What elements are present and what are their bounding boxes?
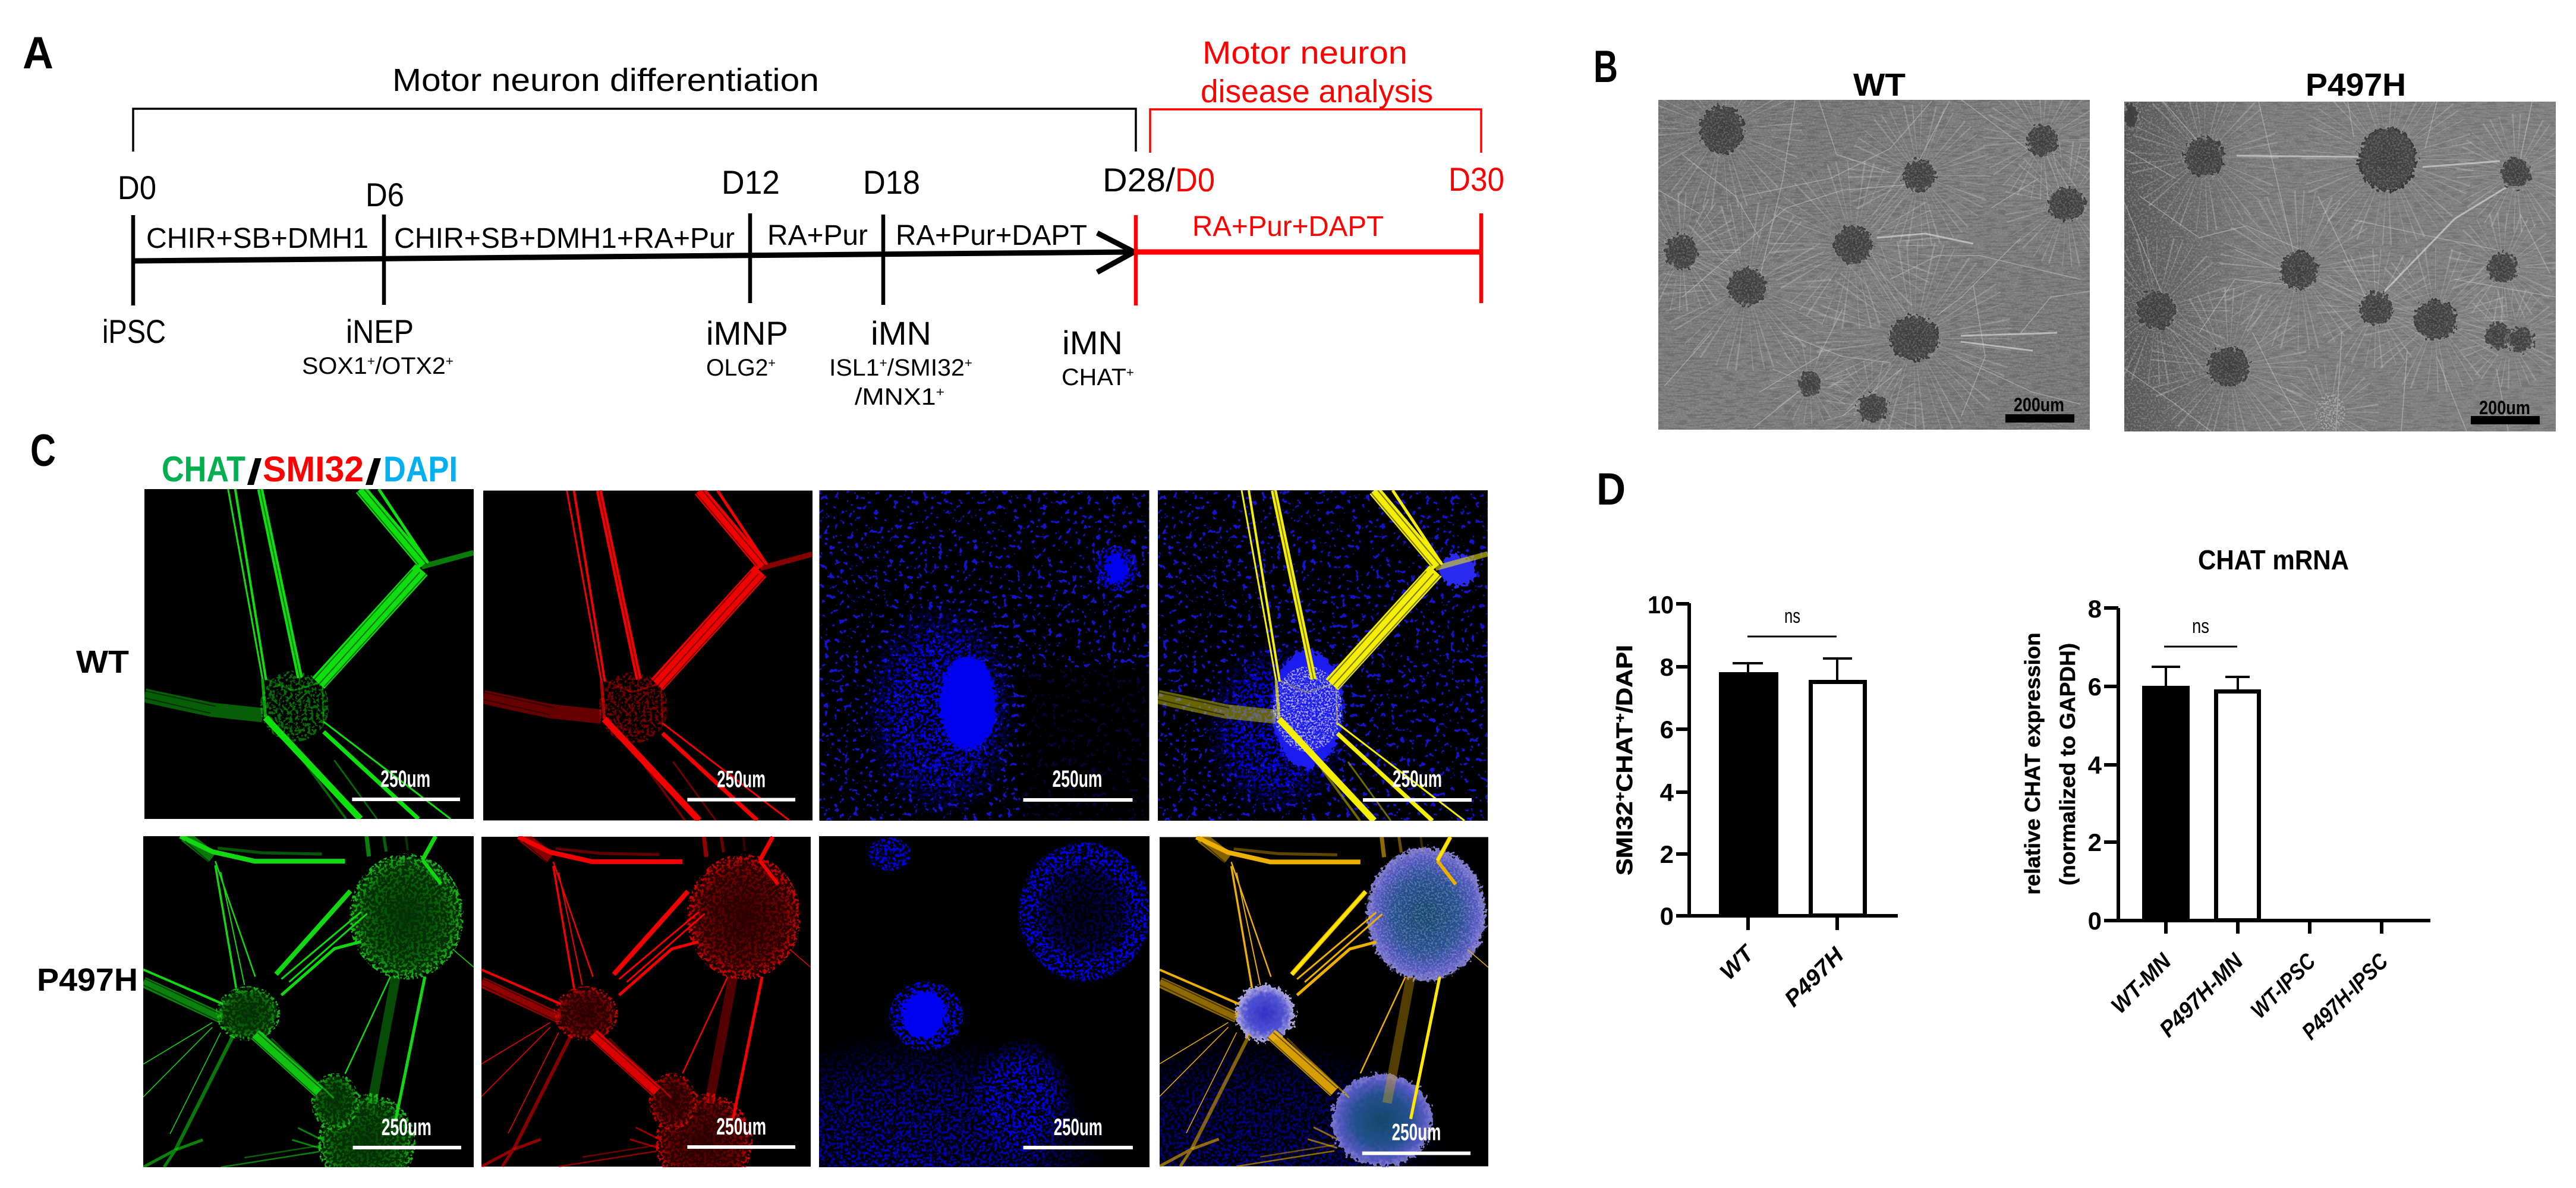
x labels: P497H-MN bbox=[2155, 948, 2249, 1042]
day labels: D12 bbox=[722, 163, 780, 201]
treatment labels: CHIR+SB+DMH1 bbox=[146, 223, 369, 254]
micrograph: P497H bbox=[2124, 102, 2556, 431]
bar chart: CHAT mRNA bbox=[2020, 544, 2430, 1045]
y axis title: /DAPI bbox=[1613, 645, 1637, 713]
image: WT CHAT green bbox=[144, 489, 474, 819]
image: P497H SMI32 red bbox=[481, 836, 811, 1167]
scale bar bbox=[1362, 1120, 1470, 1155]
cell stage labels: iMN bbox=[871, 314, 931, 352]
y axis title: CHAT bbox=[1613, 723, 1637, 792]
marker labels bbox=[302, 353, 1134, 410]
y tick labels: 0 bbox=[2088, 907, 2102, 935]
image: WT DAPI blue bbox=[819, 490, 1150, 821]
scale bar bbox=[353, 1114, 461, 1149]
cell stage labels: iNEP bbox=[346, 313, 414, 350]
marker labels: OLG2 bbox=[706, 355, 770, 381]
scale bar 200um: 200um bbox=[2479, 397, 2530, 418]
label WT: WT bbox=[1853, 67, 1906, 103]
bracket: disease analysis bbox=[1150, 109, 1481, 153]
scale bar bbox=[687, 767, 795, 802]
heading: motor neuron disease analysis: Motor neuron bbox=[1202, 35, 1407, 71]
day labels: D6 bbox=[366, 176, 404, 213]
treatment labels: RA+Pur+DAPT bbox=[1192, 211, 1384, 242]
heading: motor neuron disease analysis: disease analysis bbox=[1201, 74, 1433, 109]
panel letter B: B bbox=[1594, 42, 1618, 92]
panel letter A: A bbox=[23, 28, 53, 78]
y tick labels: 0 bbox=[1660, 902, 1674, 930]
scale bar: 250um bbox=[1392, 1120, 1441, 1146]
treatment labels: CHIR+SB+DMH1+RA+Pur bbox=[394, 223, 735, 254]
scale bar bbox=[687, 1114, 795, 1149]
image: P497H CHAT green bbox=[143, 836, 474, 1167]
scale bar: 250um bbox=[1393, 766, 1442, 792]
scale bar bbox=[352, 766, 460, 801]
y tick labels: 4 bbox=[1660, 779, 1674, 806]
bracket: differentiation bbox=[133, 109, 1136, 152]
marker labels: /OTX2 bbox=[375, 353, 446, 379]
image: P497H DAPI blue bbox=[819, 836, 1150, 1167]
x labels: WT-MN bbox=[2106, 948, 2177, 1019]
bar WT-MN bbox=[2142, 667, 2190, 921]
y axis title: SMI32 bbox=[1613, 810, 1637, 875]
bar P497H bbox=[1810, 658, 1865, 915]
image: WT SMI32 red bbox=[483, 490, 813, 821]
marker labels: ISL1 bbox=[829, 355, 878, 381]
y axis title: + bbox=[1613, 713, 1629, 723]
timeline arrow bbox=[133, 213, 1481, 305]
day labels: D18 bbox=[863, 163, 920, 201]
scale bar 200um: 200um bbox=[2014, 394, 2064, 415]
treatment labels: RA+Pur+DAPT bbox=[896, 220, 1087, 251]
panel A: differentiation timeline bbox=[23, 28, 1504, 410]
scale bar: 250um bbox=[717, 767, 766, 793]
y tick labels bbox=[1648, 591, 1674, 930]
marker labels: + bbox=[367, 354, 375, 368]
marker labels: + bbox=[965, 355, 972, 370]
significance: ns: ns bbox=[2192, 615, 2209, 638]
image: WT merge bbox=[1158, 490, 1488, 821]
x labels: WT bbox=[1715, 940, 1760, 985]
day labels: D28/ bbox=[1103, 161, 1175, 198]
x labels bbox=[2106, 948, 2394, 1045]
marker labels: /SMI32 bbox=[887, 355, 965, 381]
y tick labels: 2 bbox=[1660, 840, 1674, 868]
row label P497H: P497H bbox=[37, 962, 138, 998]
y tick labels: 2 bbox=[2088, 828, 2102, 856]
scale bar 200um bbox=[2005, 394, 2074, 423]
scale bar: 250um bbox=[380, 766, 430, 792]
x labels: WT-IPSC bbox=[2246, 948, 2321, 1023]
heading: motor neuron disease analysis bbox=[1201, 35, 1433, 109]
y axis title: (normalized to GAPDH) bbox=[2055, 643, 2080, 886]
chart title: CHAT mRNA bbox=[2198, 544, 2349, 575]
y tick labels: 4 bbox=[2088, 751, 2102, 779]
y tick labels: 8 bbox=[1660, 653, 1674, 681]
channel legend bbox=[162, 449, 458, 492]
heading: motor neuron differentiation: Motor neuron differentiation bbox=[392, 62, 819, 98]
marker labels: + bbox=[768, 355, 776, 370]
day labels bbox=[118, 160, 1504, 213]
y tick labels: 8 bbox=[2088, 595, 2102, 623]
significance: ns: ns bbox=[1784, 605, 1800, 628]
scale bar bbox=[1024, 1114, 1133, 1149]
x labels bbox=[1715, 940, 1850, 1012]
panel C: immunofluorescence grid bbox=[30, 426, 1488, 1188]
axes bbox=[2104, 608, 2430, 934]
scale bar: 250um bbox=[716, 1114, 766, 1140]
bar WT bbox=[1719, 663, 1778, 916]
y axis title: + bbox=[1613, 792, 1629, 801]
y tick labels: 10 bbox=[1648, 591, 1674, 619]
marker labels: + bbox=[446, 354, 454, 368]
marker labels: + bbox=[936, 385, 944, 399]
y tick labels: 6 bbox=[2088, 673, 2102, 701]
panel letter C: C bbox=[30, 426, 56, 476]
marker labels: /MNX1 bbox=[855, 384, 927, 410]
day labels: D0 bbox=[118, 169, 156, 206]
y axis title bbox=[2020, 632, 2080, 895]
marker labels: + bbox=[879, 355, 887, 370]
channel legend: / bbox=[365, 452, 382, 492]
marker labels: CHAT bbox=[1062, 364, 1125, 390]
cell stage labels: iMNP bbox=[706, 314, 788, 352]
panel D: bar charts bbox=[1596, 464, 2430, 1045]
scale bar 200um bbox=[2471, 397, 2540, 424]
marker labels: + bbox=[1126, 365, 1134, 380]
treatment labels: RA+Pur bbox=[767, 220, 868, 251]
significance: ns bbox=[2164, 615, 2237, 647]
day labels: D0 bbox=[1175, 161, 1215, 198]
image: P497H merge bbox=[1160, 836, 1488, 1167]
panel B: bright-field micrographs bbox=[1594, 42, 2556, 445]
micrograph: WT bbox=[1658, 100, 2090, 430]
scale bar: 250um bbox=[1052, 766, 1102, 792]
channel legend: SMI32 bbox=[263, 449, 364, 489]
channel legend: / bbox=[247, 452, 263, 492]
scale bar: 250um bbox=[382, 1114, 432, 1140]
row label WT: WT bbox=[76, 644, 129, 680]
scale bar: 250um bbox=[1054, 1114, 1103, 1140]
y axis title: relative CHAT expression bbox=[2020, 632, 2045, 895]
panel letter D: D bbox=[1596, 464, 1626, 515]
y tick labels: 6 bbox=[1660, 716, 1674, 743]
label P497H: P497H bbox=[2306, 67, 2406, 103]
x labels: P497H bbox=[1780, 943, 1850, 1012]
y tick labels bbox=[2088, 595, 2102, 935]
marker labels: SOX1 bbox=[302, 353, 366, 379]
treatment labels bbox=[146, 211, 1384, 254]
cell stage labels: iPSC bbox=[102, 313, 166, 350]
scale bar bbox=[1024, 766, 1133, 802]
cell stage labels bbox=[102, 313, 1123, 361]
bar chart: SMI32+CHAT+/DAPI bbox=[1613, 591, 1898, 1012]
bar P497H-MN bbox=[2216, 677, 2259, 920]
channel legend: CHAT bbox=[162, 449, 245, 489]
axes bbox=[1676, 603, 1898, 930]
day labels: D30 bbox=[1448, 160, 1504, 198]
cell stage labels: iMN bbox=[1062, 324, 1123, 361]
scale bar bbox=[1363, 766, 1472, 802]
x labels: P497H-IPSC bbox=[2297, 948, 2394, 1045]
channel legend: DAPI bbox=[383, 449, 458, 489]
